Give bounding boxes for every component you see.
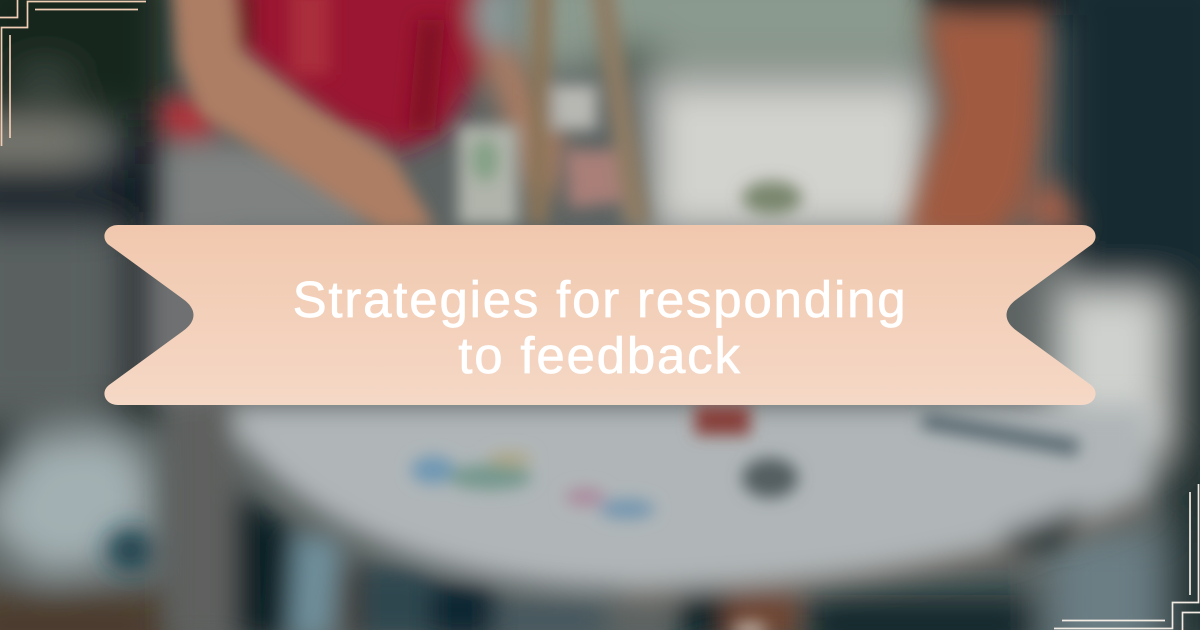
corner frame: top left [0, 0, 146, 146]
title [293, 271, 907, 384]
table [232, 405, 1150, 588]
corner frame: bottom right [1054, 484, 1200, 630]
skirt [162, 145, 372, 235]
red top [225, 0, 495, 152]
table items [411, 456, 455, 484]
title: to feedback [458, 327, 742, 384]
person right [905, 15, 1045, 240]
title: Strategies for responding [293, 271, 907, 328]
arm right side of red [482, 40, 565, 200]
